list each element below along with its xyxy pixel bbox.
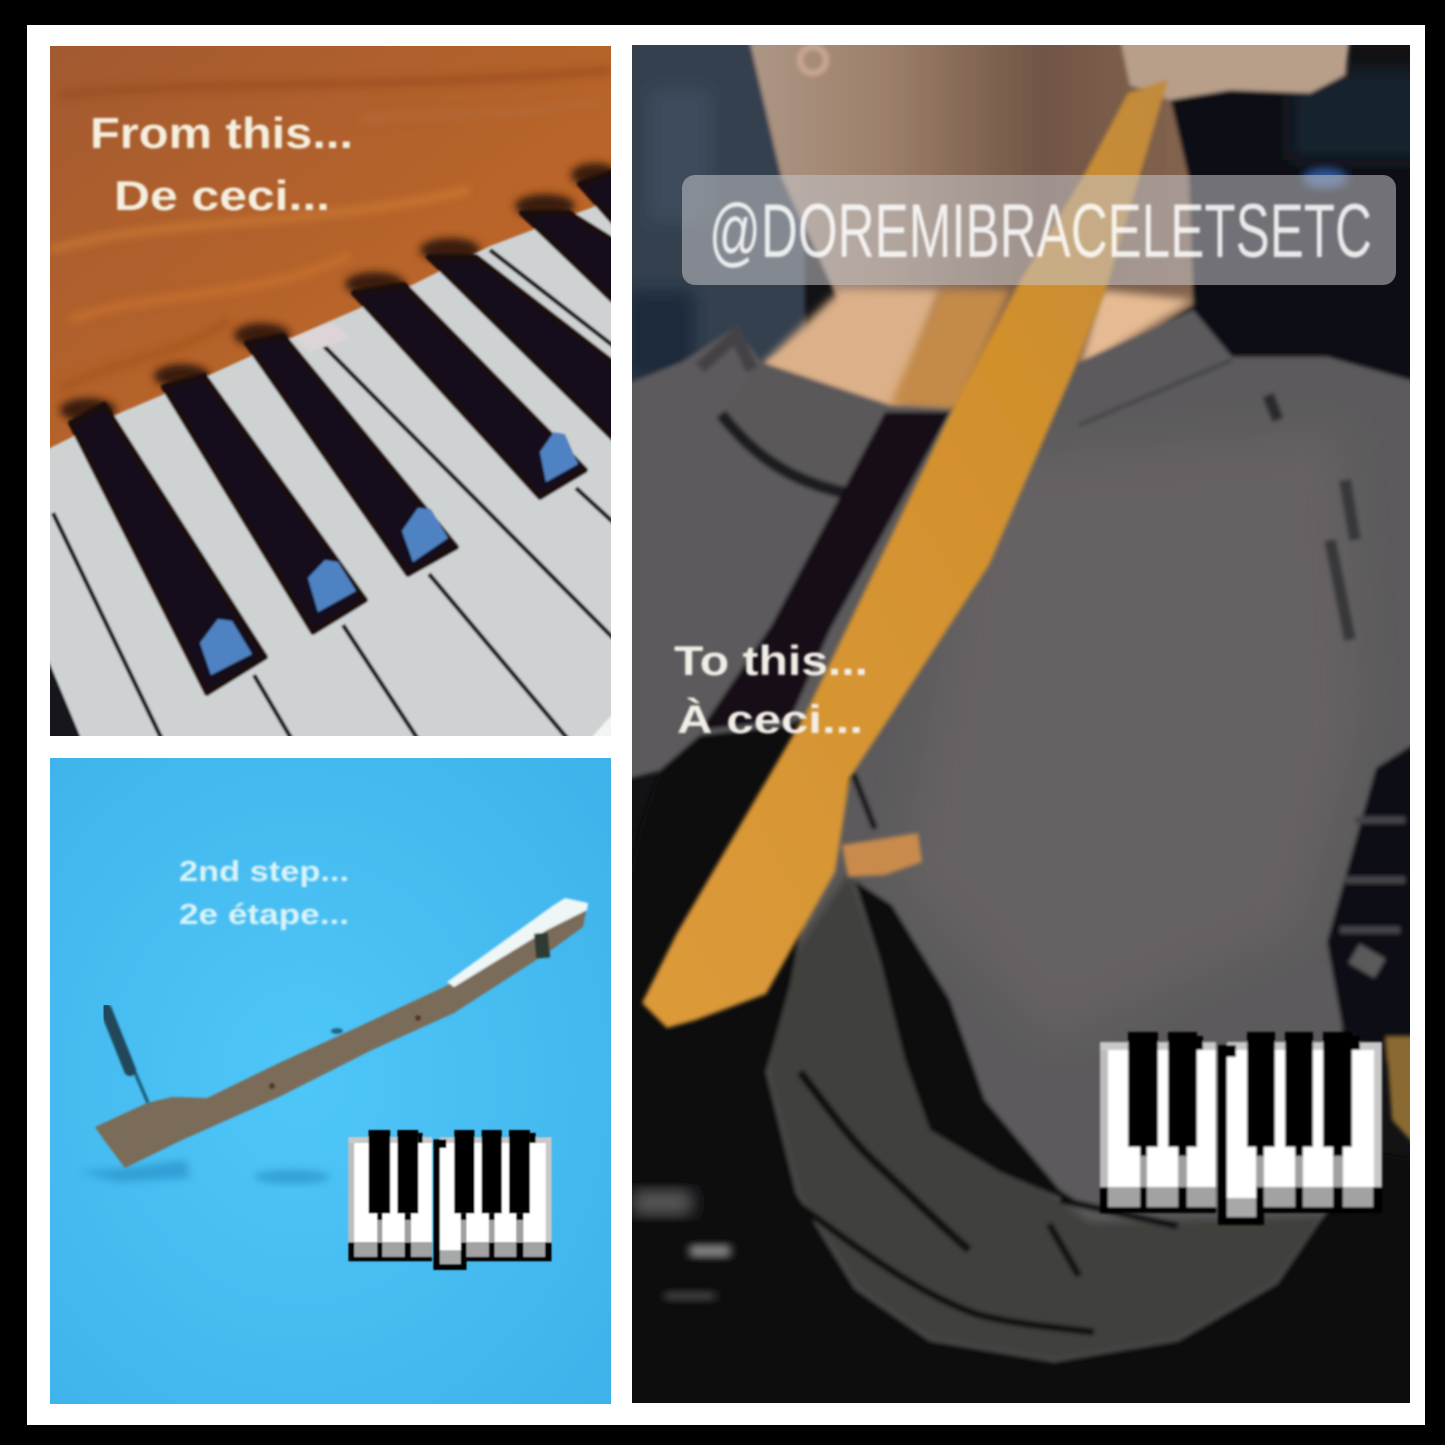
right machinery bbox=[1326, 746, 1410, 1063]
key lever bbox=[95, 898, 588, 1168]
strap bbox=[700, 412, 950, 730]
shirt bbox=[625, 310, 1420, 1362]
shirt lower shade bbox=[766, 870, 1327, 1362]
white keys bbox=[40, 168, 625, 750]
blue key highlights bbox=[200, 432, 578, 675]
inner collar bbox=[846, 416, 888, 490]
earring bbox=[800, 47, 826, 73]
panel: to this, finished back scratcher bbox=[625, 38, 1420, 1410]
left dark area bbox=[625, 725, 1420, 1410]
screw pin bbox=[106, 1010, 148, 1103]
heading: to this: To this... bbox=[674, 637, 868, 684]
wooden key strip bbox=[642, 80, 1168, 1028]
black keys bbox=[71, 168, 625, 693]
icon: piano large bbox=[1100, 1032, 1382, 1225]
hand bbox=[1120, 38, 1350, 100]
heading: 2e etape: 2e étape... bbox=[179, 899, 349, 931]
label badge bbox=[682, 175, 1396, 285]
heading: from this: From this... bbox=[90, 109, 353, 158]
neck bbox=[749, 38, 1200, 420]
heading: 2nd step: 2nd step... bbox=[179, 856, 349, 888]
shadow of key lever bbox=[78, 1160, 330, 1184]
heading: a ceci: À ceci... bbox=[677, 697, 863, 742]
panel: piano keys, from this bbox=[40, 46, 625, 750]
background left blue bbox=[625, 38, 805, 398]
icon: piano small bbox=[348, 1130, 551, 1270]
panel: second step bbox=[50, 758, 611, 1404]
heading: de ceci: De ceci... bbox=[114, 172, 330, 219]
background right dark bbox=[1170, 88, 1410, 381]
shirt fold lines bbox=[854, 882, 1074, 1202]
shadow behind black key tops bbox=[60, 163, 619, 422]
